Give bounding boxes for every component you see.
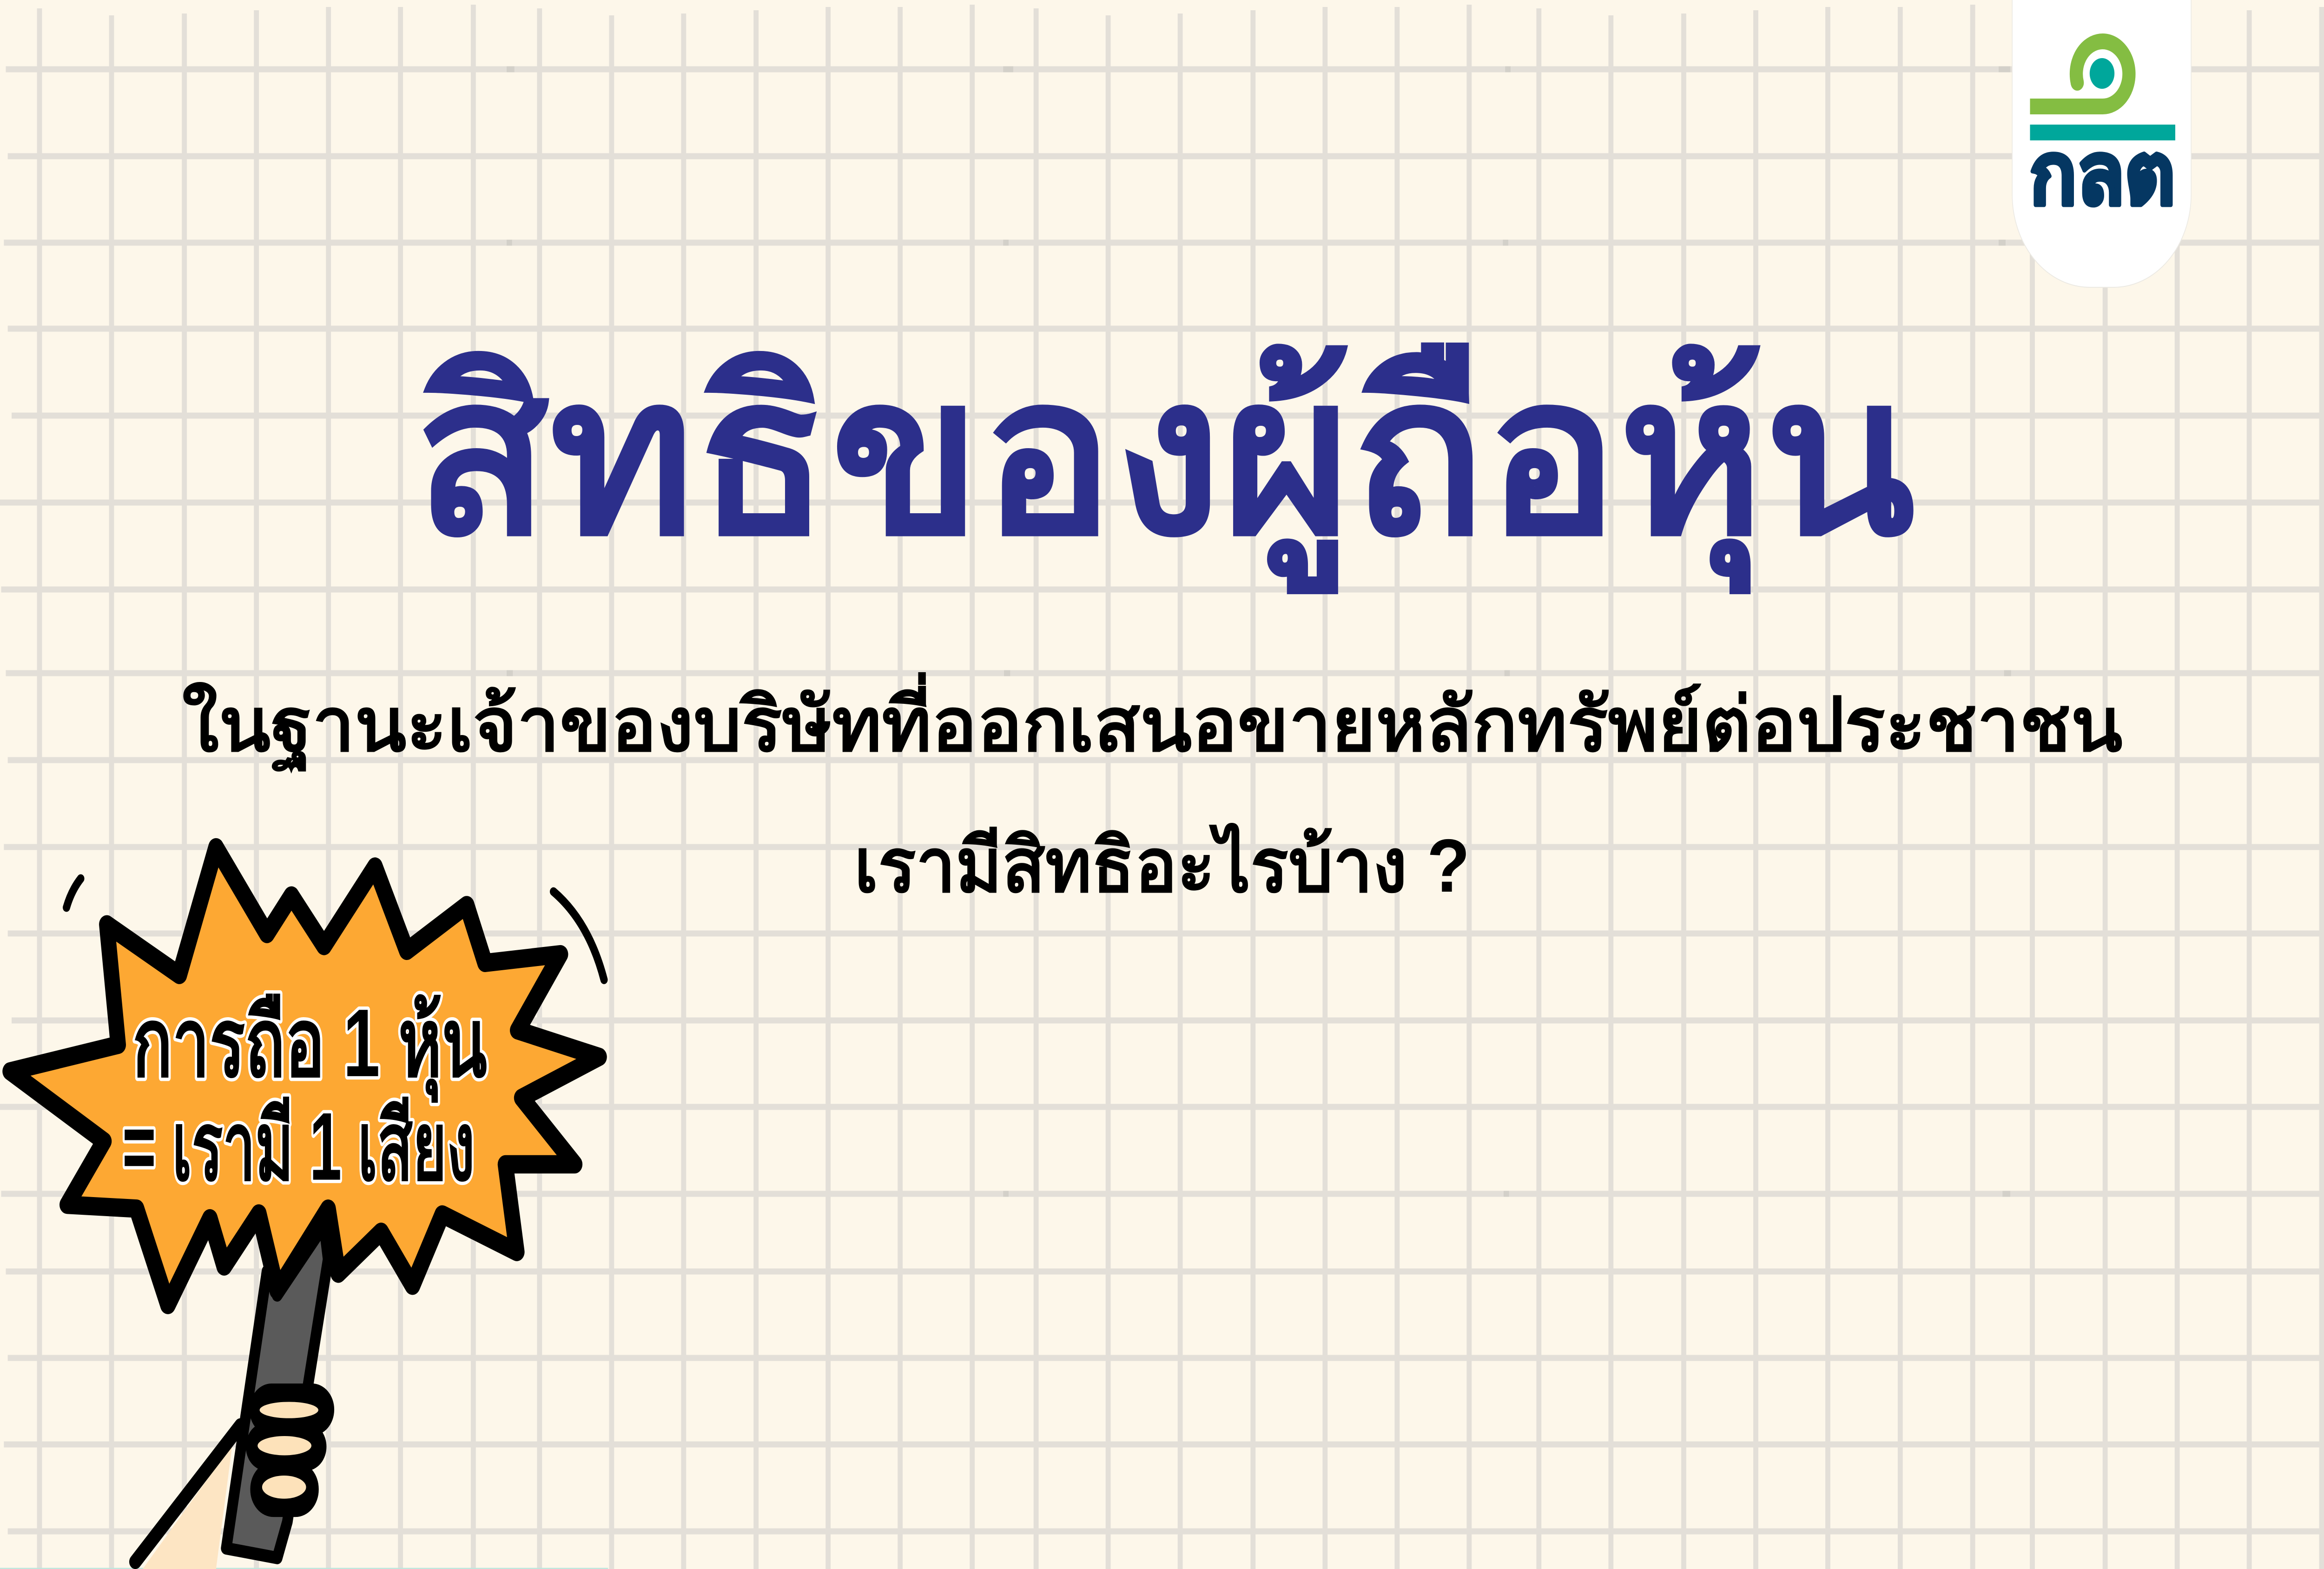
illustration: hand holding burst sign — [10, 847, 604, 1569]
logo mark: green spiral — [2030, 41, 2129, 106]
logo mark: teal bar — [2030, 125, 2175, 140]
motion line right — [554, 892, 604, 980]
sign text line 2: = เรามี 1 เสียง — [122, 1092, 475, 1200]
logo badge — [2012, 0, 2191, 287]
logo mark: teal dot — [2090, 58, 2114, 89]
pole — [226, 1225, 328, 1558]
title: สิทธิของผู้ถือหุ้น — [415, 332, 1916, 595]
burst sign outline — [10, 847, 599, 1305]
sign text line 1: การถือ 1 หุ้น — [132, 989, 487, 1103]
fingers — [246, 1384, 334, 1517]
burst sign fill — [10, 847, 599, 1305]
logo wordmark: กลต — [2030, 126, 2175, 222]
subtitle line 2: เรามีสิทธิอะไรบ้าง ? — [854, 823, 1470, 908]
arm — [135, 1425, 240, 1569]
motion line left — [66, 879, 81, 907]
subtitle line 1: ในฐานะเจ้าของบริษัทที่ออกเสนอขายหลักทรัพย์ต่อประชาชน — [182, 672, 2123, 774]
